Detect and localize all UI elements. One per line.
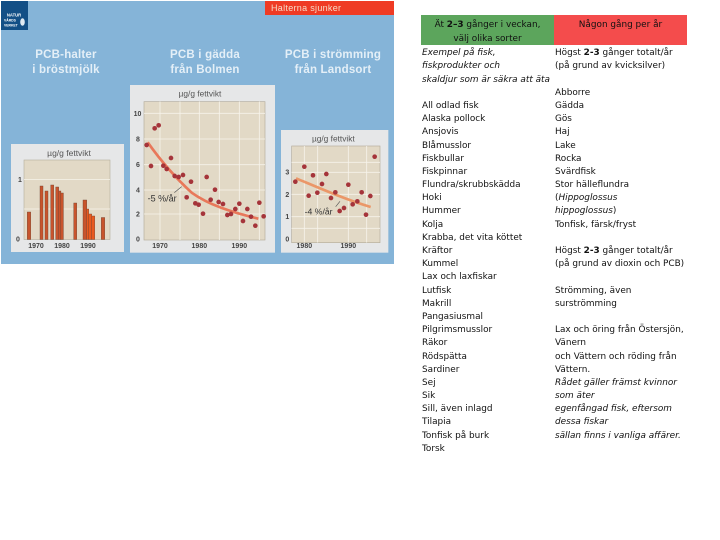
right column: restricted species: Rocka xyxy=(555,154,582,164)
left column: safe species: Torsk xyxy=(422,444,445,454)
right column: restricted species: Gös xyxy=(555,114,572,124)
right column: restricted species: som äter xyxy=(555,391,595,401)
blue background panel xyxy=(1,1,394,264)
right column: restricted species: Rådet gäller främst kvinnor xyxy=(555,378,677,388)
table header: eat 2-3 times a week: Ät 2–3 gånger i veckan, xyxy=(435,20,540,30)
chart: pike scatter: 2 xyxy=(136,211,140,218)
left column: safe species: Sej xyxy=(422,378,436,388)
logo: Naturvårdsverket: VERKET xyxy=(4,24,19,28)
chart: breast milk bars: 1970 xyxy=(28,243,44,250)
banner: Halterna sjunker xyxy=(265,1,394,15)
right column: restricted species: (Hippoglossus xyxy=(555,193,617,203)
left column: safe species: Sardiner xyxy=(422,365,459,375)
right column: restricted species: Strömming, även xyxy=(555,286,631,296)
left column: safe species: Tilapia xyxy=(422,417,451,427)
chart: herring scatter: µg/g fettvikt xyxy=(312,133,355,143)
right column: restricted species: (på grund av dioxin och PCB) xyxy=(555,259,684,269)
heading: pike: PCB i gädda xyxy=(170,49,240,61)
left column: safe species: Fiskpinnar xyxy=(422,167,467,177)
left column: safe species: Alaska pollock xyxy=(422,114,485,124)
chart: herring scatter xyxy=(281,130,388,253)
chart: pike scatter: 4 xyxy=(136,187,140,194)
left column: safe species: Blåmusslor xyxy=(422,140,471,150)
right column: restricted species: sällan finns i vanliga affärer. xyxy=(555,431,681,441)
heading: breast milk: i bröstmjölk xyxy=(32,64,100,76)
left column: safe species: Sill, även inlagd xyxy=(422,404,493,414)
left column: safe species: Rödspätta xyxy=(422,352,467,362)
left column: safe species: All odlad fisk xyxy=(422,101,479,111)
logo: Naturvårdsverket: NATUR xyxy=(7,12,21,18)
chart: pike scatter: µg/g fettvikt xyxy=(179,89,222,99)
chart: pike scatter: 8 xyxy=(136,136,140,143)
left column: safe species: Hummer xyxy=(422,206,461,216)
left column: safe species: skaldjur som är säkra att äta xyxy=(422,75,550,85)
chart: pike scatter: 10 xyxy=(134,111,142,118)
chart: herring scatter: 1 xyxy=(285,214,289,221)
right column: restricted species: Haj xyxy=(555,127,570,137)
chart: herring scatter: -4 %/år xyxy=(305,207,333,217)
right column: restricted species: Svärdfisk xyxy=(555,167,596,177)
chart: pike scatter: 1970 xyxy=(152,243,168,250)
heading: herring: från Landsort xyxy=(295,64,371,76)
left column: safe species: Lutfisk xyxy=(422,286,451,296)
right column: restricted species: Tonfisk, färsk/fryst xyxy=(555,220,636,230)
table header: eat 2-3 times a week: välj olika sorter xyxy=(453,34,522,44)
left column: safe species: Pangasiusmal xyxy=(422,312,483,322)
banner: Halterna sjunker: Halterna sjunker xyxy=(271,3,341,13)
chart: breast milk bars: 1 xyxy=(18,177,22,184)
left column: safe species: Tonfisk på burk xyxy=(422,431,489,441)
left column: safe species: Sik xyxy=(422,391,435,401)
left column: safe species: Kräftor xyxy=(422,246,452,256)
left column: safe species: Hoki xyxy=(422,193,442,203)
left column: safe species: Kolja xyxy=(422,220,443,230)
chart: herring scatter: 1980 xyxy=(297,243,312,250)
left column: safe species: Pilgrimsmusslor xyxy=(422,325,492,335)
chart: pike scatter: 1990 xyxy=(232,243,247,250)
left column: safe species: Makrill xyxy=(422,299,451,309)
chart: breast milk bars: 0 xyxy=(16,236,20,244)
heading: herring: PCB i strömming xyxy=(285,49,381,61)
left column: safe species: fiskprodukter och xyxy=(422,61,500,71)
right column: restricted species: Vänern xyxy=(555,338,586,348)
table header: sometime per year xyxy=(554,15,687,45)
right column: restricted species: Högst 2-3 gånger totalt/år xyxy=(555,48,673,58)
left column: safe species: Lax och laxfiskar xyxy=(422,272,497,282)
right column: restricted species: dessa fiskar xyxy=(555,417,608,427)
chart: herring scatter: 3 xyxy=(285,170,289,177)
heading: pike: från Bolmen xyxy=(170,64,240,76)
right column: restricted species: Lax och öring från Östersjön, xyxy=(555,325,684,335)
left column: safe species: Kummel xyxy=(422,259,458,269)
heading: breast milk: PCB-halter xyxy=(35,49,97,61)
chart: pike scatter: 6 xyxy=(136,162,140,169)
left column: safe species: Fiskbullar xyxy=(422,154,464,164)
right column: restricted species: Lake xyxy=(555,140,576,150)
table header: sometime per year: Någon gång per år xyxy=(579,20,662,30)
chart: pike scatter: 0 xyxy=(136,237,140,244)
left column: safe species xyxy=(422,47,550,454)
chart: breast milk bars: 1990 xyxy=(80,243,96,250)
chart: herring scatter: 2 xyxy=(285,192,289,199)
logo: Naturvårdsverket: VÅRDS xyxy=(4,18,17,22)
right column: restricted species: hippoglossus) xyxy=(555,206,616,216)
left column: safe species: Ansjovis xyxy=(422,127,459,137)
chart: pike scatter xyxy=(130,85,275,253)
logo: Naturvårdsverket xyxy=(1,1,28,30)
table header: eat 2-3 times a week xyxy=(421,15,554,45)
right column: restricted species: och Vättern och röding från xyxy=(555,352,677,362)
chart: pike scatter: -5 %/år xyxy=(148,193,177,203)
chart: herring scatter: 0 xyxy=(285,237,289,244)
chart: herring scatter: 1990 xyxy=(341,243,356,250)
right column: restricted species: Abborre xyxy=(555,88,590,98)
right column: restricted species: Stor hälleflundra xyxy=(555,180,629,190)
left column: safe species: Flundra/skrubbskädda xyxy=(422,180,521,190)
right column: restricted species: (på grund av kvicksilver) xyxy=(555,61,665,71)
chart: breast milk bars: µg/g fettvikt xyxy=(47,148,91,158)
left column: safe species: Krabba, det vita köttet xyxy=(422,233,522,243)
right column: restricted species: egenfångad fisk, eftersom xyxy=(555,404,672,414)
chart: pike scatter: 1980 xyxy=(192,243,207,250)
chart: breast milk bars: 1980 xyxy=(54,243,70,250)
left column: safe species: Exempel på fisk, xyxy=(422,48,496,58)
right column: restricted species: Vättern. xyxy=(555,365,590,375)
figure: PCB levels image xyxy=(1,1,394,264)
chart: breast milk bars xyxy=(11,144,124,252)
right column: restricted species: Gädda xyxy=(555,101,584,111)
right column: restricted species: Högst 2-3 gånger totalt/år xyxy=(555,246,673,256)
right column: restricted species xyxy=(554,47,684,441)
left column: safe species: Räkor xyxy=(422,338,447,348)
right column: restricted species: surströmming xyxy=(555,299,617,309)
